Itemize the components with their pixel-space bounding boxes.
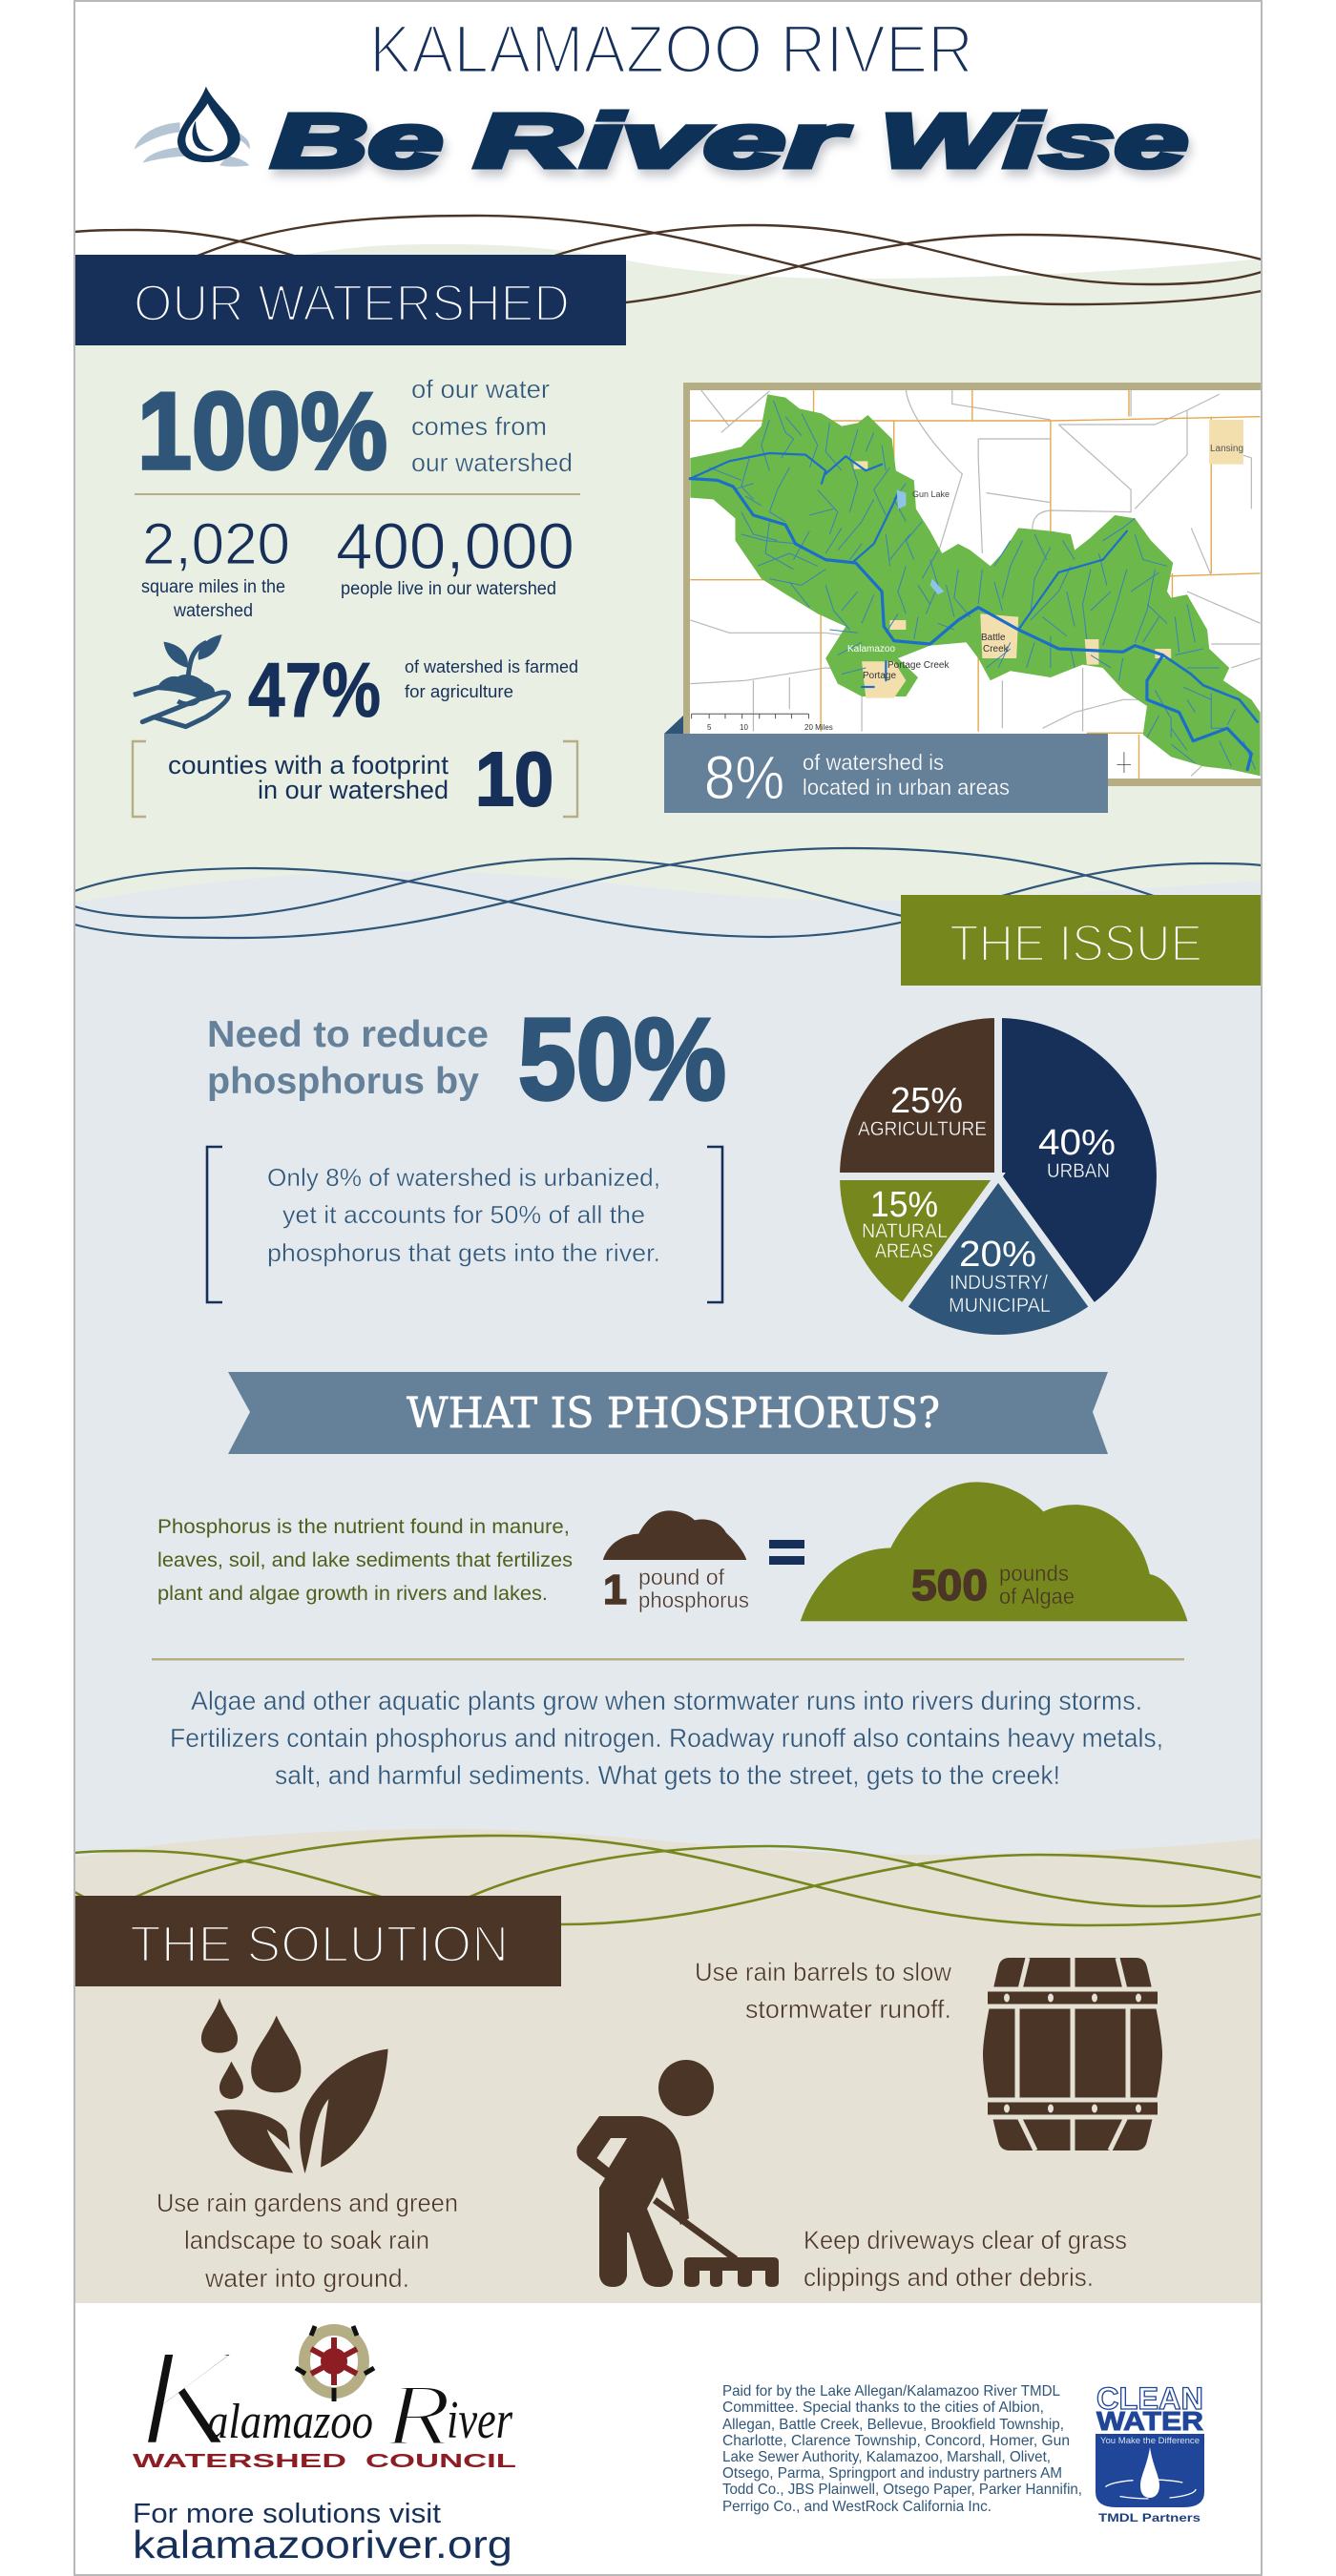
logo: Kalamazoo River Watershed Council: WATERSHED: [133, 2451, 346, 2472]
text: sponsors and thanks: Charlotte, Clarence Township, Concord, Homer, Gun: [722, 2433, 1070, 2449]
map: Kalamazoo River watershed: Gun Lake: [912, 489, 950, 499]
text: rain barrels: [695, 1958, 951, 2024]
pie slice: urban 40 percent: [998, 1014, 1160, 1307]
stat: 100 percent of our water: our watershed: [411, 448, 573, 477]
text: sponsors and thanks: Otsego, Parma, Springport and industry partners AM: [722, 2465, 1062, 2482]
stat: 400,000 people: 400,000: [336, 509, 574, 583]
pie chart: phosphorus sources: 20%: [959, 1235, 1036, 1275]
heading: need to reduce phosphorus by 50 percent: 50%: [518, 994, 726, 1124]
map: Kalamazoo River watershed: 10: [740, 723, 748, 732]
pie slice: natural areas 15 percent: [836, 1176, 998, 1307]
logo: Clean Water TMDL Partners: TMDL Partners: [1098, 2511, 1200, 2524]
icon: small pile, 1 pound of phosphorus: [603, 1510, 749, 1613]
text: sponsors and thanks: Perrigo Co., and WestRock California Inc.: [722, 2499, 992, 2515]
heading: need to reduce phosphorus by 50 percent: phosphorus by: [207, 1061, 479, 1102]
decorative river lines: top: [74, 216, 1262, 308]
stat: 2,020 square miles: watershed: [173, 601, 253, 621]
icon: small pile, 1 pound of phosphorus: pound of: [638, 1565, 725, 1589]
section banner: the solution: THE SOLUTION: [130, 1916, 509, 1973]
text: sponsors and thanks: Lake Sewer Authority, Kalamazoo, Marshall, Olivet,: [722, 2449, 1051, 2465]
pie chart: phosphorus sources: NATURAL: [862, 1220, 948, 1242]
logo: Clean Water TMDL Partners: WATER: [1096, 2406, 1203, 2436]
section banner: our watershed: [74, 255, 626, 345]
icon: large pile, 500 pounds of algae: of Algae: [999, 1584, 1075, 1609]
text: rain gardens: landscape to soak rain: [184, 2226, 429, 2254]
pie chart: phosphorus sources: URBAN: [1047, 1160, 1110, 1182]
icon: hand holding seedling: [134, 634, 229, 727]
map: Kalamazoo River watershed: Portage: [863, 671, 896, 681]
logo: Kalamazoo River Watershed Council: iver: [447, 2391, 512, 2450]
callout: 10 counties: counties with a footprint: [168, 751, 449, 779]
pie chart: phosphorus sources: 25%: [890, 1081, 963, 1121]
pie chart: phosphorus sources: 40%: [1038, 1123, 1116, 1163]
text: sponsors and thanks: Paid for by the Lake Allegan/Kalamazoo River TMDL: [722, 2383, 1060, 2399]
callout: only 8 percent urbanized: Only 8% of watershed is urbanized,: [267, 1163, 660, 1192]
text: keep driveways clear: [804, 2226, 1127, 2292]
icon: rain barrel: [981, 1958, 1164, 2150]
icon: person raking: [576, 2060, 779, 2287]
text: sponsors and thanks: Allegan, Battle Creek, Bellevue, Brookfield Township,: [722, 2417, 1064, 2433]
callout: 10 counties: [133, 737, 577, 821]
text: sponsors and thanks: Todd Co., JBS Plainwell, Otsego Paper, Parker Hannifin,: [722, 2482, 1082, 2498]
logo: Kalamazoo River Watershed Council: R: [384, 2366, 451, 2463]
text: phosphorus definition: leaves, soil, and lake sediments that fertilizes: [157, 1549, 573, 1571]
icon: large pile, 500 pounds of algae: 500: [911, 1561, 988, 1610]
text: algae and stormwater explanation: Algae and other aquatic plants grow when stormwater runs into rivers during storms.: [191, 1686, 1142, 1715]
map: Kalamazoo River watershed: 20 Miles: [804, 723, 833, 732]
pie chart: phosphorus sources: INDUSTRY/: [950, 1272, 1048, 1294]
title: Kalamazoo River: KALAMAZOO RIVER: [369, 12, 973, 88]
text: sponsors and thanks: [722, 2383, 1082, 2515]
text: algae and stormwater explanation: [170, 1686, 1163, 1790]
callout: 8 percent urban: [664, 716, 1108, 813]
icon: large pile, 500 pounds of algae: pounds: [999, 1561, 1069, 1586]
emblem: sun medallion: [296, 2326, 374, 2401]
text: phosphorus definition: Phosphorus is the nutrient found in manure,: [157, 1516, 570, 1538]
icon: small pile, 1 pound of phosphorus: phosphorus: [638, 1588, 749, 1612]
section banner: our watershed: OUR WATERSHED: [134, 275, 570, 332]
section banner: the issue: [901, 895, 1262, 986]
icon: large pile, 500 pounds of algae: [801, 1482, 1187, 1621]
callout: 8 percent urban: of watershed is: [803, 750, 944, 775]
stat: 2,020 square miles: [141, 511, 290, 621]
callout: only 8 percent urbanized: phosphorus that gets into the river.: [267, 1238, 660, 1267]
pie chart: phosphorus sources: MUNICIPAL: [949, 1295, 1051, 1317]
text: phosphorus definition: plant and algae growth in rivers and lakes.: [157, 1583, 548, 1605]
text: phosphorus definition: [157, 1516, 573, 1605]
stat: 2,020 square miles: 2,020: [142, 511, 290, 576]
callout: only 8 percent urbanized: [207, 1147, 722, 1302]
text: rain gardens: water into ground.: [204, 2264, 409, 2293]
map: Kalamazoo River watershed: Creek: [983, 644, 1010, 654]
callout: 8 percent urban: 8%: [704, 743, 784, 812]
logo heading: Be River Wise: River: [474, 98, 849, 183]
map: Kalamazoo River watershed: Battle: [981, 633, 1006, 643]
stat: 47 percent farmed: for agriculture: [405, 682, 513, 701]
stat: 400,000 people: people live in our watershed: [341, 579, 556, 599]
logo: Kalamazoo River Watershed Council: alamazoo: [207, 2395, 373, 2449]
stat: 47 percent farmed: of watershed is farmed: [405, 657, 578, 676]
callout: 8 percent urban: located in urban areas: [803, 775, 1010, 800]
stat: 100 percent of our water: 100%: [137, 371, 387, 492]
section banner: the issue: THE ISSUE: [950, 915, 1202, 972]
stat: 47 percent farmed: [248, 648, 578, 734]
icon: equals sign: [769, 1540, 804, 1565]
stat: 2,020 square miles: square miles in the: [141, 577, 285, 597]
pie chart: phosphorus sources: AGRICULTURE: [858, 1118, 987, 1140]
heading: need to reduce phosphorus by 50 percent: Need to reduce: [207, 1014, 489, 1055]
logo heading: Be River Wise: [271, 98, 1188, 183]
logo: Clean Water TMDL Partners: You Make the Difference: [1100, 2436, 1200, 2446]
stat: 47 percent farmed: 47%: [248, 648, 381, 734]
text: sponsors and thanks: Committee. Special thanks to the cities of Albion,: [722, 2399, 1044, 2416]
stat: 100 percent of our water: [137, 371, 573, 492]
text: keep driveways clear: clippings and other debris.: [804, 2263, 1094, 2292]
decorative river lines: lower: [74, 1836, 1262, 1925]
map: Kalamazoo River watershed: [683, 383, 1262, 786]
logo: Clean Water TMDL Partners: CLEAN: [1096, 2381, 1203, 2416]
ribbon heading: what is phosphorus: WHAT IS PHOSPHORUS?: [407, 1389, 940, 1438]
icon: rain drops and leaves: [201, 1998, 388, 2173]
stat: 100 percent of our water: comes from: [411, 412, 547, 441]
icon: small pile, 1 pound of phosphorus: 1: [603, 1567, 627, 1613]
callout: only 8 percent urbanized: yet it accounts for 50% of all the: [282, 1200, 645, 1229]
logo: Kalamazoo River Watershed Council: K: [131, 2318, 245, 2477]
pie chart: phosphorus sources: [836, 1014, 1160, 1339]
call to action: website: [133, 2499, 512, 2566]
stat: 100 percent of our water: of our water: [411, 375, 550, 404]
text: rain gardens: Use rain gardens and green: [157, 2189, 458, 2217]
text: rain gardens: [157, 2189, 458, 2293]
text: algae and stormwater explanation: Fertilizers contain phosphorus and nitrogen. Roadway runoff also contains heavy metals,: [170, 1723, 1163, 1753]
icon: water drop logo: [134, 87, 250, 167]
call to action: website: kalamazooriver.org: [133, 2523, 512, 2566]
ribbon heading: what is phosphorus: [228, 1372, 1108, 1454]
map: Kalamazoo River watershed: 5: [707, 723, 712, 732]
callout: 10 counties: in our watershed: [258, 776, 449, 804]
pie chart: phosphorus sources: AREAS: [875, 1240, 933, 1262]
pie slice: agriculture 25 percent: [836, 1014, 998, 1176]
call to action: website: For more solutions visit: [133, 2499, 441, 2529]
text: rain barrels: Use rain barrels to slow: [695, 1958, 951, 1986]
map: Kalamazoo River watershed: Kalamazoo: [847, 644, 895, 654]
text: keep driveways clear: Keep driveways clear of grass: [804, 2226, 1127, 2254]
logo: Clean Water TMDL Partners: [1096, 2381, 1204, 2524]
callout: 10 counties: 10: [475, 737, 553, 821]
logo: Kalamazoo River Watershed Council: COUNCIL: [365, 2451, 516, 2472]
pie chart: phosphorus sources: 15%: [870, 1185, 938, 1225]
text: rain barrels: stormwater runoff.: [745, 1995, 951, 2024]
logo: Kalamazoo River Watershed Council: [131, 2318, 516, 2477]
map: Kalamazoo River watershed: Lansing: [1210, 444, 1243, 454]
section banner: the solution: [74, 1896, 561, 1986]
heading: need to reduce phosphorus by 50 percent: [207, 994, 726, 1124]
logo heading: Be River Wise: Wise: [880, 98, 1188, 183]
pie slice: industry 20 percent: [903, 1176, 1094, 1339]
text: algae and stormwater explanation: salt, and harmful sediments. What gets to the street, gets to the creek!: [275, 1760, 1060, 1790]
logo heading: Be River Wise: Be: [271, 98, 443, 183]
map: Kalamazoo River watershed: Portage Creek: [887, 660, 950, 671]
decorative river lines: middle: [74, 848, 1262, 940]
